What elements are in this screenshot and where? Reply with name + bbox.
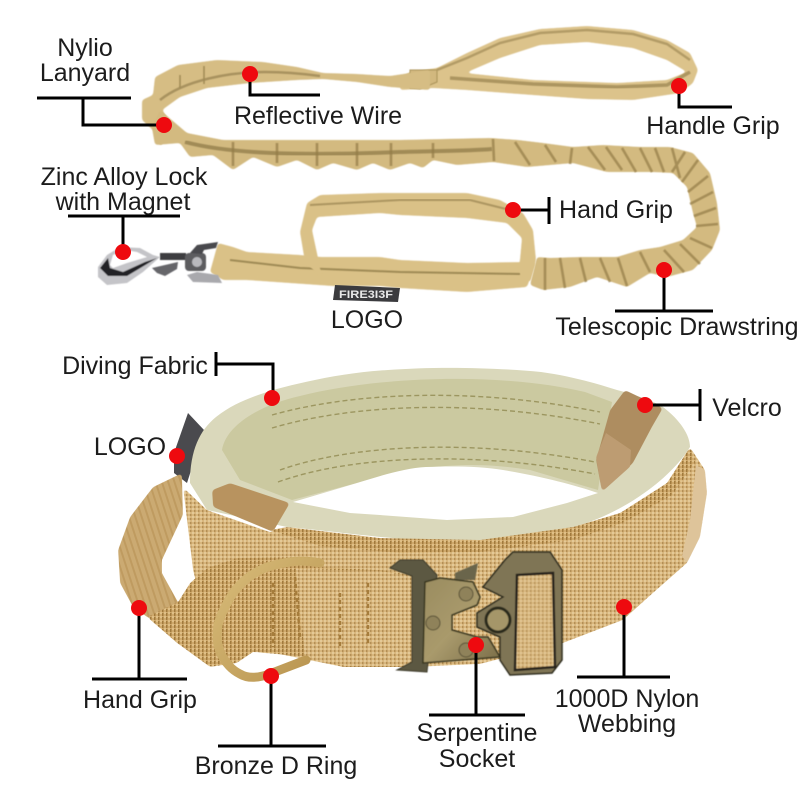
callout: 1000D Nylon Webbing (555, 599, 699, 738)
callout: Telescopic Drawstring: Telescopic Drawstring (555, 313, 799, 341)
callout: Reflective Wire: Reflective Wire (234, 102, 402, 130)
callout: Handle Grip: Handle Grip (646, 112, 780, 140)
collar logo tag (174, 413, 204, 483)
product: bungee leash (98, 26, 720, 302)
callout: Nylio Lanyard: Lanyard (40, 59, 130, 87)
leash logo tag: FIRE3I3F (339, 289, 393, 301)
callout: Bronze D Ring (195, 668, 357, 780)
callout: Zinc Alloy Lock: Zinc Alloy Lock (41, 163, 208, 191)
leash logo tag (333, 285, 400, 302)
icon: bronze d ring (217, 561, 320, 677)
icon: metal buckle (390, 552, 562, 675)
leash handle loop (400, 26, 698, 100)
callout: Zinc Alloy Lock: with Magnet (55, 188, 190, 216)
callout: Nylio Lanyard (37, 34, 172, 133)
collar webbing (183, 447, 707, 667)
callout: leash Hand Grip (505, 196, 673, 224)
callout: Velcro: Velcro (712, 394, 782, 422)
leash elastic section (152, 110, 720, 290)
collar strap over d ring (147, 557, 415, 673)
callout: Serpentine Socket: Socket (439, 745, 515, 773)
callout: 1000D Nylon Webbing: 1000D Nylon (555, 685, 699, 713)
callout: Velcro (637, 389, 782, 422)
callout: Reflective Wire (234, 66, 402, 130)
callout: Diving Fabric (62, 352, 280, 406)
callout: collar LOGO: LOGO (94, 433, 166, 461)
callout: Handle Grip (646, 78, 780, 140)
callout: 1000D Nylon Webbing: Webbing (578, 710, 676, 738)
leash hand grip (300, 193, 536, 283)
collar inner lining (190, 368, 690, 543)
collar handle (118, 473, 190, 627)
callout: Serpentine Socket: Serpentine (417, 719, 537, 747)
icon: zinc alloy snap hook (98, 242, 222, 285)
product: tactical collar (118, 368, 707, 677)
callout: Serpentine Socket (417, 637, 537, 773)
callout: Nylio Lanyard: Nylio (57, 34, 113, 62)
callout: leash Hand Grip: Hand Grip (559, 196, 673, 224)
leash upper strap (142, 60, 430, 147)
leash lower strap (210, 243, 536, 292)
callout: Zinc Alloy Lock (41, 163, 208, 260)
callout: collar Hand Grip (83, 600, 197, 714)
callout: Bronze D Ring: Bronze D Ring (195, 752, 357, 780)
callout: Telescopic Drawstring (555, 262, 799, 341)
callout: collar Hand Grip: Hand Grip (83, 686, 197, 714)
label: leash LOGO: LOGO (331, 306, 403, 334)
callout: Diving Fabric: Diving Fabric (62, 352, 208, 380)
velcro patches (212, 390, 663, 532)
